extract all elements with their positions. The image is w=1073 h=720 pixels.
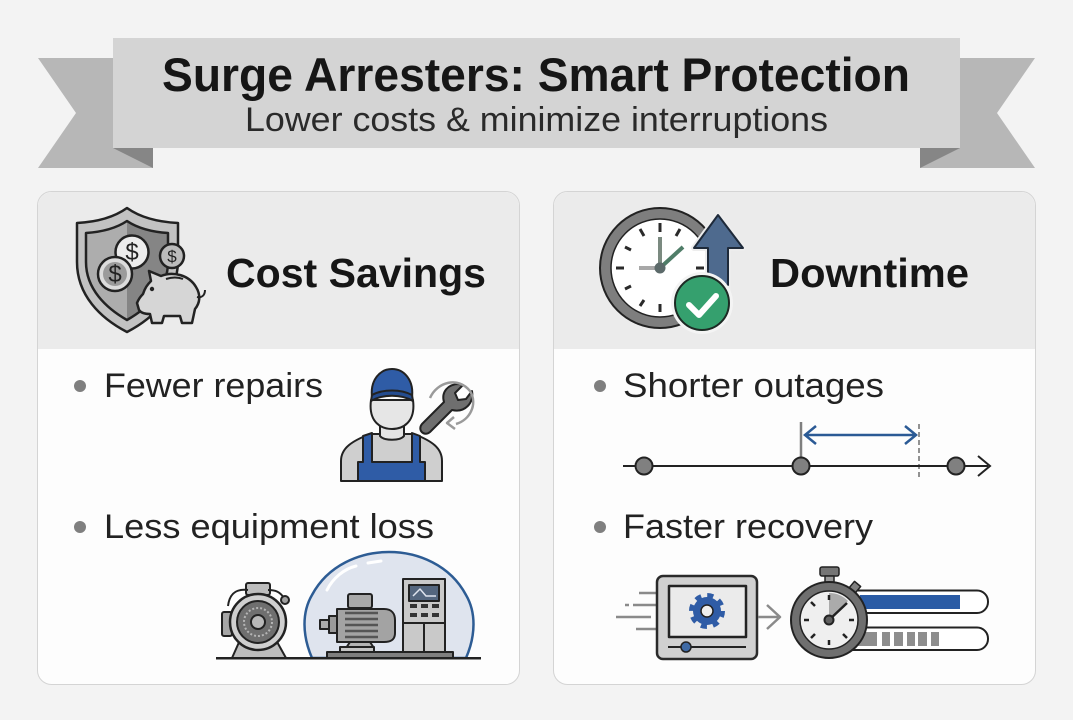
icon: protected equipment under dome [222,552,474,658]
panel header band [38,192,519,349]
panel card [554,192,1036,684]
panel card [38,192,520,684]
right ribbon tail [920,58,1035,168]
timeline chart [623,422,990,480]
progress bars [840,590,988,650]
$ marks on coins: $ [167,247,177,266]
icon: stopwatch [791,567,867,658]
ground line [216,657,481,660]
panel: cost savings [38,192,520,684]
panel: downtime [554,192,1036,684]
title: Surge Arresters: Smart Protection [162,48,910,101]
bullet: shorter outages: Shorter outages [623,367,884,405]
heading: cost savings: Cost Savings [226,250,486,296]
icon: shield with coins and piggy bank [77,208,205,332]
$ marks on coins: $ [108,261,122,288]
$ marks on coins: $ [125,239,139,266]
bullet: fewer repairs: Fewer repairs [104,367,323,405]
heading: downtime: Downtime [770,250,969,296]
title banner [38,38,1035,168]
$ marks on coins [108,239,177,288]
panel header band [554,192,1035,349]
icon: clock with up arrow and check [600,208,743,334]
subtitle: Lower costs & minimize interruptions [245,101,828,139]
bullet: less equipment loss: Less equipment loss [104,508,434,546]
left ribbon tail [38,58,153,168]
icon: system restart monitor [616,576,780,659]
bullet: faster recovery: Faster recovery [623,508,873,546]
banner body [113,38,960,148]
icon: technician with wrench [341,369,473,481]
